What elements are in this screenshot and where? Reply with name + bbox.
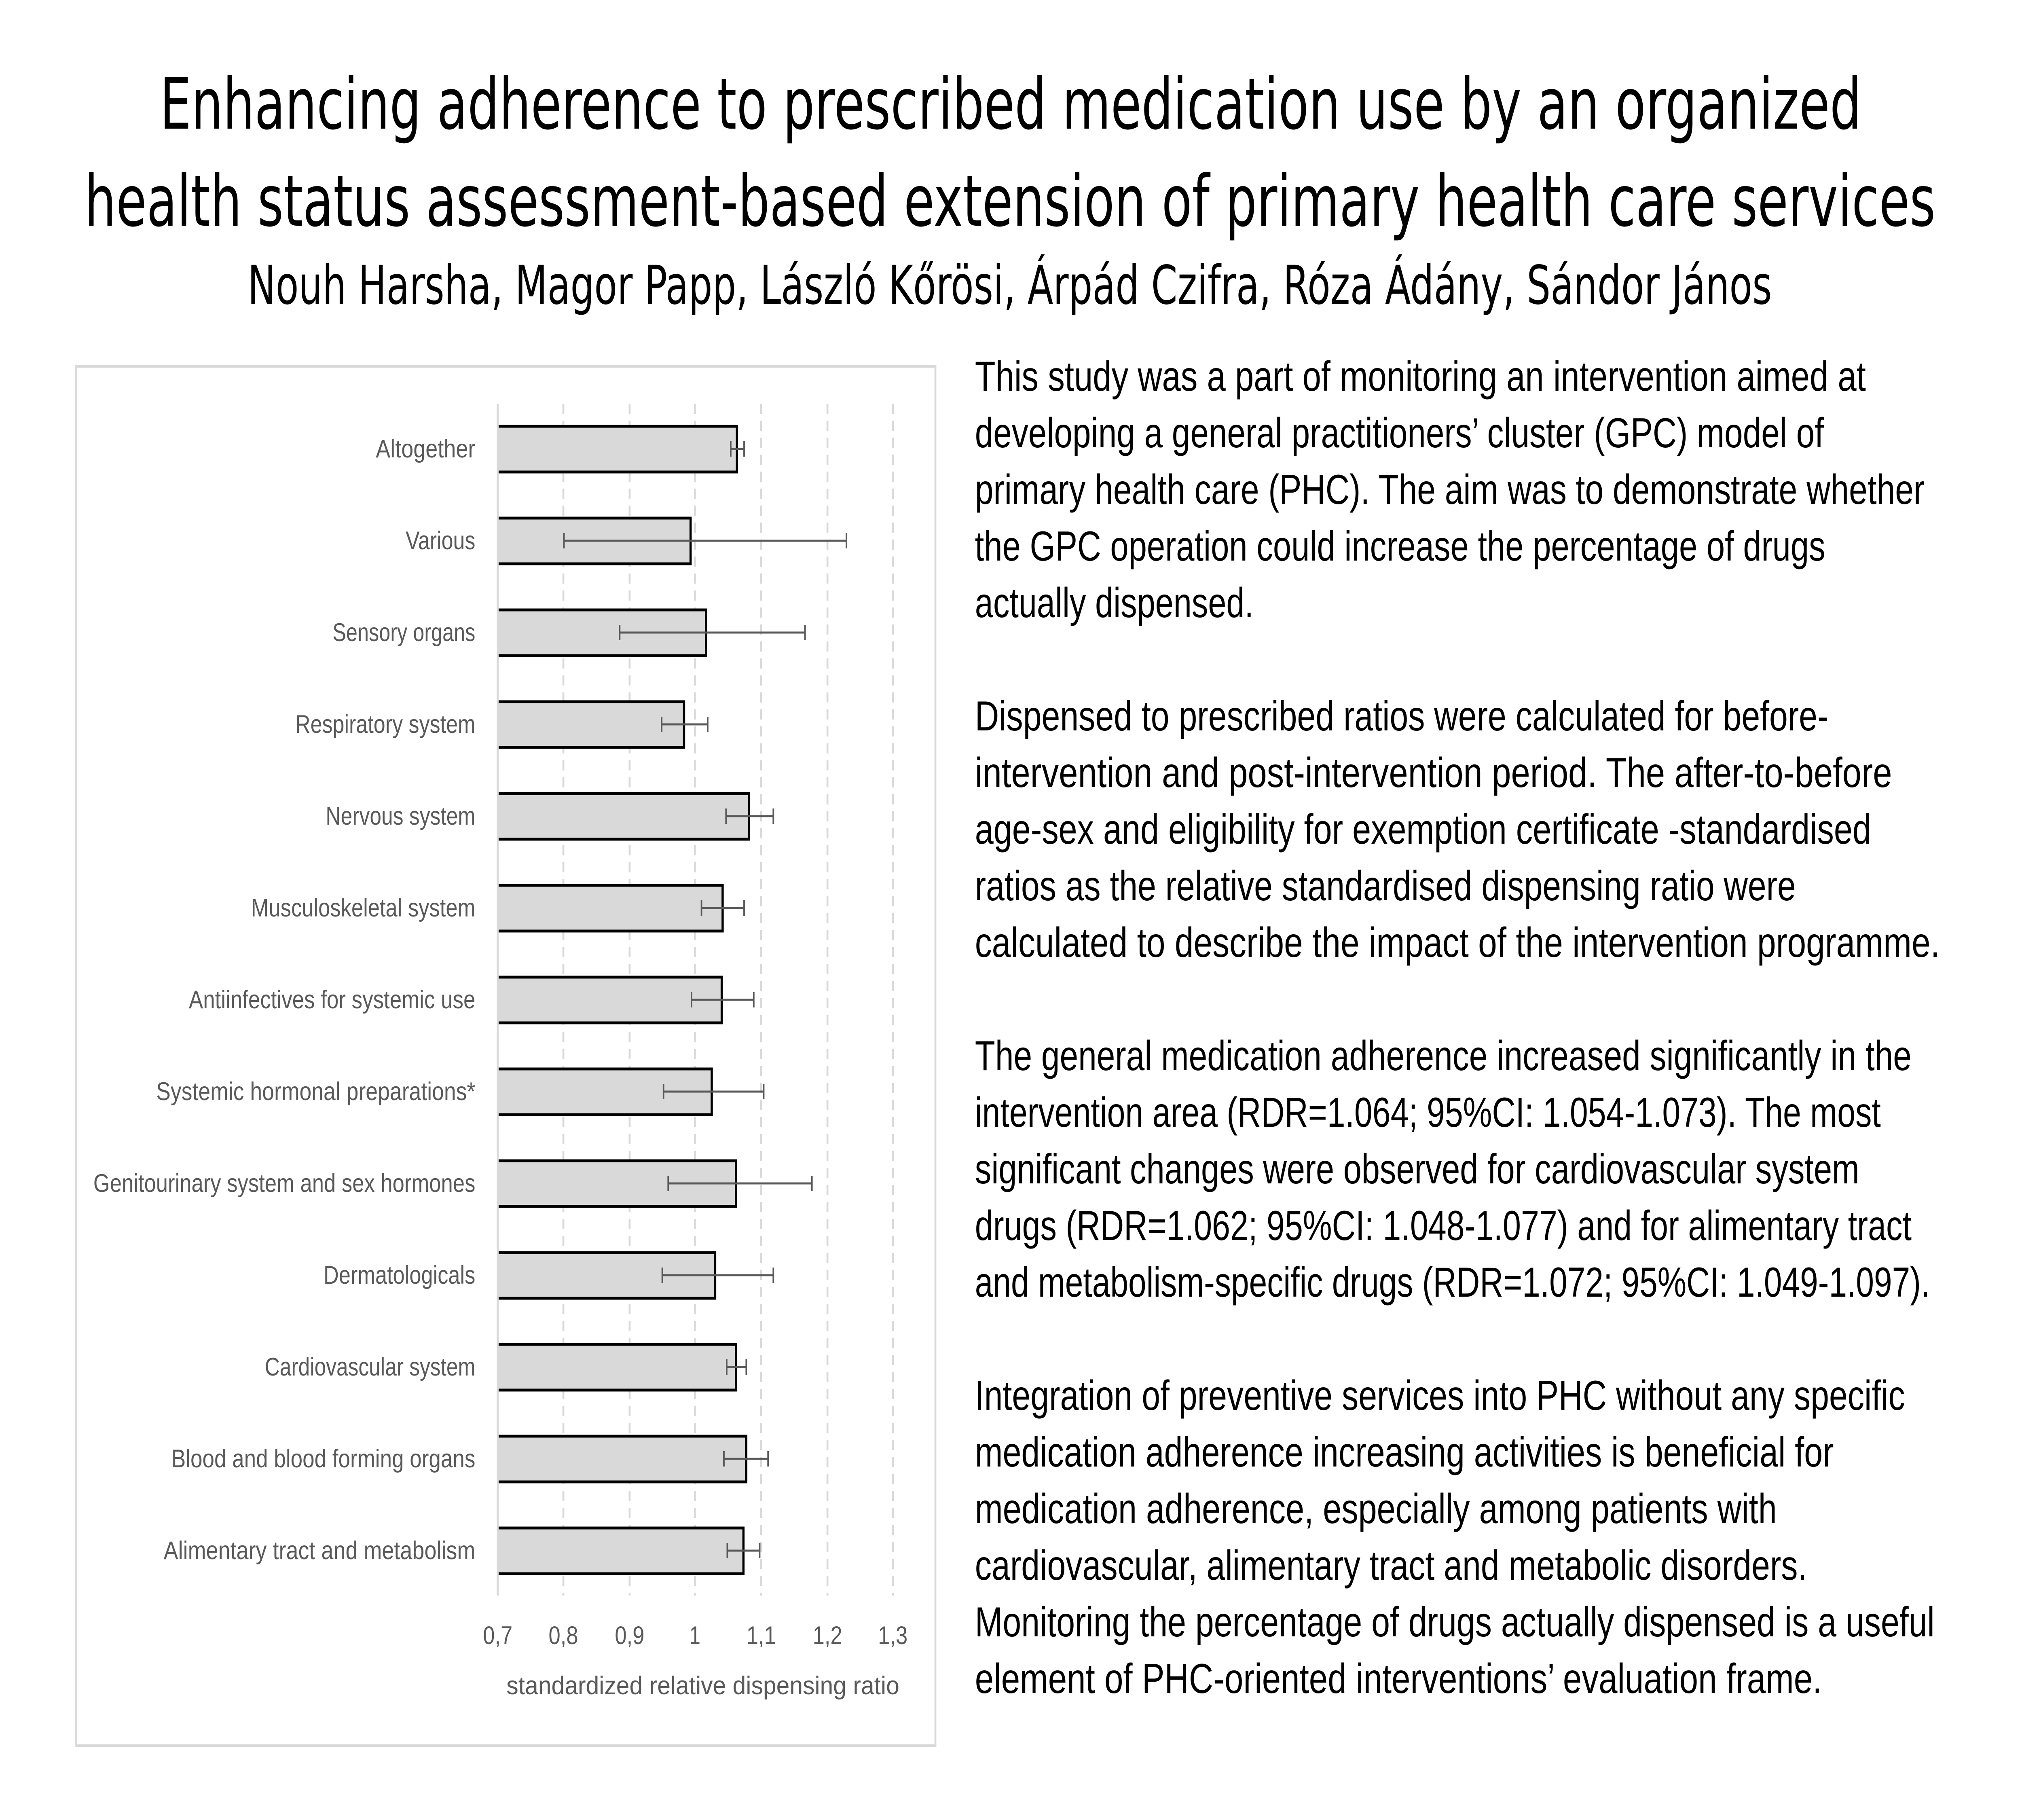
bar: Altogether [376, 426, 744, 472]
text block: results: and metabolism-specific drugs (RDR=1.072; 95%CI: 1.049-1.097). [975, 1259, 1930, 1306]
x axis tick labels: 0,8 [549, 1621, 578, 1649]
x axis tick labels: 0,9 [615, 1621, 644, 1649]
bar: Sensory organs [332, 610, 805, 656]
text block: conclusions: cardiovascular, alimentary tract and metabolic disorders. [975, 1542, 1807, 1589]
bar: Sensory organs: Sensory organs [332, 618, 475, 646]
bar: Nervous system: Nervous system [326, 802, 475, 830]
bar: Antiinfectives for systemic use [189, 977, 754, 1023]
text block: conclusions [975, 1372, 1935, 1702]
x axis tick labels [483, 1621, 907, 1649]
bar: Respiratory system: Respiratory system [295, 710, 475, 738]
bar: Alimentary tract and metabolism: Alimentary tract and metabolism [164, 1536, 475, 1564]
text block: conclusions: element of PHC-oriented interventions’ evaluation frame. [975, 1655, 1822, 1702]
bar: Musculoskeletal system [251, 885, 744, 931]
bar: Systemic hormonal preparations [156, 1069, 764, 1115]
x axis tick labels: 1,3 [878, 1621, 907, 1649]
title: Enhancing adherence to prescribed medication use by an organized [160, 63, 1861, 145]
text block: study aim: actually dispensed. [975, 579, 1254, 626]
bar: Alimentary tract and metabolism [164, 1528, 759, 1574]
bar: Blood and blood forming organs: Blood and blood forming organs [171, 1444, 475, 1473]
bar: Blood and blood forming organs [171, 1436, 768, 1482]
bar: Respiratory system [295, 702, 708, 747]
text block: results: intervention area (RDR=1.064; 95%CI: 1.054-1.073). The most [975, 1089, 1881, 1136]
text block: results: The general medication adherence increased significantly in the [975, 1032, 1912, 1079]
bar: Genitourinary system and sex hormones [93, 1161, 812, 1206]
x axis tick labels: 1 [690, 1621, 700, 1649]
text block: study aim [975, 353, 1925, 626]
text block: study aim: This study was a part of monitoring an intervention aimed at [975, 353, 1866, 400]
bar chart: standardized relative dispensing ratio [93, 404, 907, 1699]
bar: Antiinfectives for systemic use: Antiinfectives for systemic use [189, 985, 475, 1014]
text block: methods: age-sex and eligibility for exemption certificate -standardised [975, 806, 1871, 853]
bar: Dermatologicals: Dermatologicals [324, 1261, 475, 1289]
text block: study aim: developing a general practitioners’ cluster (GPC) model of [975, 409, 1824, 456]
bar: Dermatologicals [324, 1253, 773, 1298]
authors: Nouh Harsha, Magor Papp, László Kőrösi, Árpád Czifra, Róza Ádány, Sándor János [247, 254, 1772, 316]
panel: bar chart frame [76, 366, 935, 1746]
text block: conclusions: Monitoring the percentage of drugs actually dispensed is a useful [975, 1598, 1935, 1645]
bar: Musculoskeletal system: Musculoskeletal system [251, 893, 475, 922]
x axis tick labels: 0,7 [483, 1621, 512, 1649]
text block: study aim: the GPC operation could increase the percentage of drugs [975, 523, 1825, 569]
x axis tick labels: 1,2 [813, 1621, 842, 1649]
text block: results: drugs (RDR=1.062; 95%CI: 1.048-1.077) and for alimentary tract [975, 1202, 1912, 1249]
text block: methods: calculated to describe the impact of the intervention programme. [975, 919, 1940, 966]
bar: Cardiovascular system: Cardiovascular system [265, 1352, 475, 1381]
bar: Systemic hormonal preparations: Systemic hormonal preparations* [156, 1077, 475, 1105]
text block: results: significant changes were observed for cardiovascular system [975, 1145, 1859, 1192]
bar: Nervous system [326, 794, 773, 839]
bar: Cardiovascular system [265, 1344, 746, 1390]
x axis tick labels: 1,1 [747, 1621, 776, 1649]
text block: methods: ratios as the relative standardised dispensing ratio were [975, 862, 1796, 909]
x axis title: standardized relative dispensing ratio [506, 1671, 899, 1699]
title [85, 63, 1935, 242]
bar: Altogether: Altogether [376, 434, 475, 463]
text block: results [975, 1032, 1930, 1306]
text block: methods: Dispensed to prescribed ratios were calculated for before- [975, 692, 1829, 739]
bar: Genitourinary system and sex hormones: Genitourinary system and sex hormones [93, 1169, 475, 1197]
text block: methods: intervention and post-intervention period. The after-to-before [975, 749, 1892, 796]
text block: conclusions: Integration of preventive services into PHC without any specific [975, 1372, 1905, 1419]
text block: study aim: primary health care (PHC). The aim was to demonstrate whether [975, 466, 1925, 513]
bar: Various [406, 518, 846, 564]
text block: conclusions: medication adherence, especially among patients with [975, 1485, 1777, 1532]
text block: conclusions: medication adherence increasing activities is beneficial for [975, 1428, 1834, 1475]
bar: Various: Various [406, 526, 475, 554]
text block: methods [975, 692, 1940, 966]
